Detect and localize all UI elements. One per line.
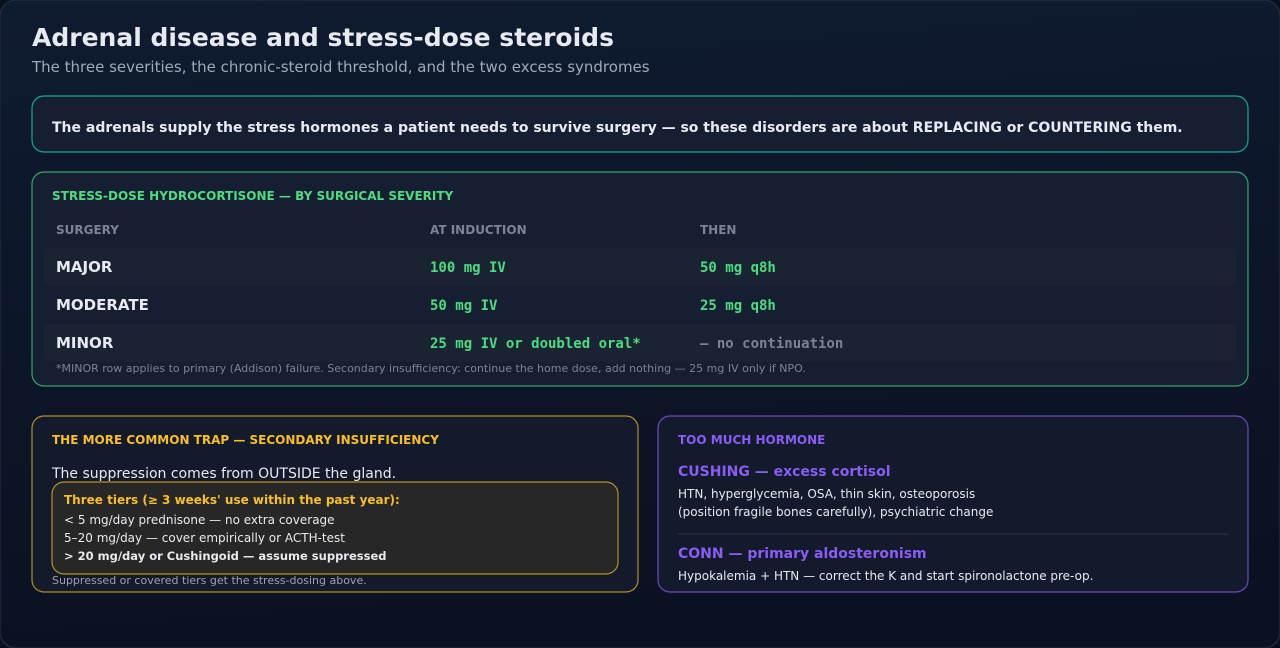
tier three: > 20 mg/day or Cushingoid — assume suppressed [64,549,386,563]
panel: key message [32,96,1248,152]
table row: moderate: MODERATE [56,296,149,314]
table row: minor: MINOR [56,334,114,352]
cushing description: (position fragile bones carefully), psychiatric change [678,505,993,519]
table header: THEN [700,223,736,237]
tier one: < 5 mg/day prednisone — no extra coverage [64,513,335,527]
table row: minor: 25 mg IV or doubled oral* [430,336,641,352]
table row: major [44,248,1236,286]
panel heading: secondary insufficiency: THE MORE COMMON TRAP — SECONDARY INSUFFICIENCY [52,433,439,447]
tier two: 5–20 mg/day — cover empirically or ACTH-test [64,531,345,545]
table header: AT INDUCTION [430,223,527,237]
table row: major: 100 mg IV [430,260,506,276]
panel: secondary insufficiency [32,416,638,592]
panel: too much hormone [658,416,1248,592]
panel heading: too much hormone: TOO MUCH HORMONE [678,433,825,447]
table row: moderate: 50 mg IV [430,298,498,314]
conn description: Hypokalemia + HTN — correct the K and start spironolactone pre-op. [678,569,1093,583]
table row: minor [44,324,1236,362]
table header: SURGERY [56,223,119,237]
table header [56,223,736,237]
subtitle: The three severities, the chronic-steroid threshold, and the two excess syndromes [31,58,650,76]
cushing heading: CUSHING — excess cortisol [678,464,891,480]
suppression statement: The suppression comes from OUTSIDE the gland. [51,466,396,482]
table row: moderate [56,296,776,314]
panel heading: stress-dose: STRESS-DOSE HYDROCORTISONE — BY SURGICAL SEVERITY [52,189,454,203]
table row: major: MAJOR [56,258,113,276]
cushing description: HTN, hyperglycemia, OSA, thin skin, osteoporosis [678,487,975,501]
table footnote: *MINOR row applies to primary (Addison) failure. Secondary insufficiency: continue the home dose, add nothing — 25 mg IV only if NPO. [56,362,806,375]
table row: minor: — no continuation [700,336,843,352]
panel: stress-dose table [32,172,1248,386]
title: Adrenal disease and stress-dose steroids [32,23,614,52]
key message text: The adrenals supply the stress hormones a patient needs to survive surgery — so these disorders are about REPLACING or COUNTERING them. [52,120,1183,136]
callout heading: Three tiers (≥ 3 weeks' use within the past year): [64,493,400,507]
conn heading: CONN — primary aldosteronism [678,546,927,562]
secondary insufficiency note: Suppressed or covered tiers get the stress-dosing above. [52,574,367,587]
table row: major: 50 mg q8h [700,260,776,276]
callout: three tiers [52,482,618,574]
table row: moderate: 25 mg q8h [700,298,776,314]
